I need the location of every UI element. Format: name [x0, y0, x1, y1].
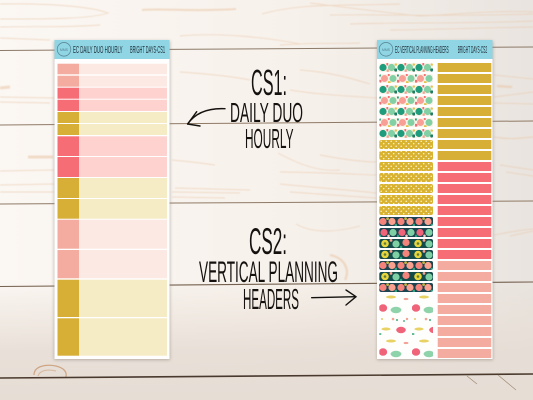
sheet header bar: [377, 40, 492, 59]
infographic canvas: VERTICAL PLANNING: [199, 256, 338, 289]
infographic canvas: BRIGHT DAYS-CS1: [130, 45, 165, 56]
panel: CS1 daily duo hourly sticker sheet: [54, 40, 170, 360]
arrow: pointing left to CS1 sheet: [188, 109, 225, 126]
sheet header bar: EC DAILY DUO HOURLY: [73, 45, 123, 56]
infographic canvas: CS1:: [251, 62, 287, 103]
solid header strips: [438, 63, 491, 358]
sheet header bar: MMS: [382, 48, 391, 52]
hourly rows: [58, 64, 167, 356]
knot: [34, 365, 66, 377]
sheet header bar: [54, 40, 170, 59]
infographic canvas: HOURLY: [245, 123, 294, 154]
text: daily duo: DAILY DUO: [230, 97, 303, 128]
infographic canvas: HEADERS: [243, 284, 299, 316]
patterned header strips: [379, 63, 433, 359]
infographic canvas: CS2:: [249, 221, 287, 262]
sheet header bar: MMS: [60, 48, 69, 52]
arrow: pointing right to CS2 sheet: [312, 290, 356, 305]
panel: CS2 vertical planning headers sticker sheet: [377, 40, 493, 360]
